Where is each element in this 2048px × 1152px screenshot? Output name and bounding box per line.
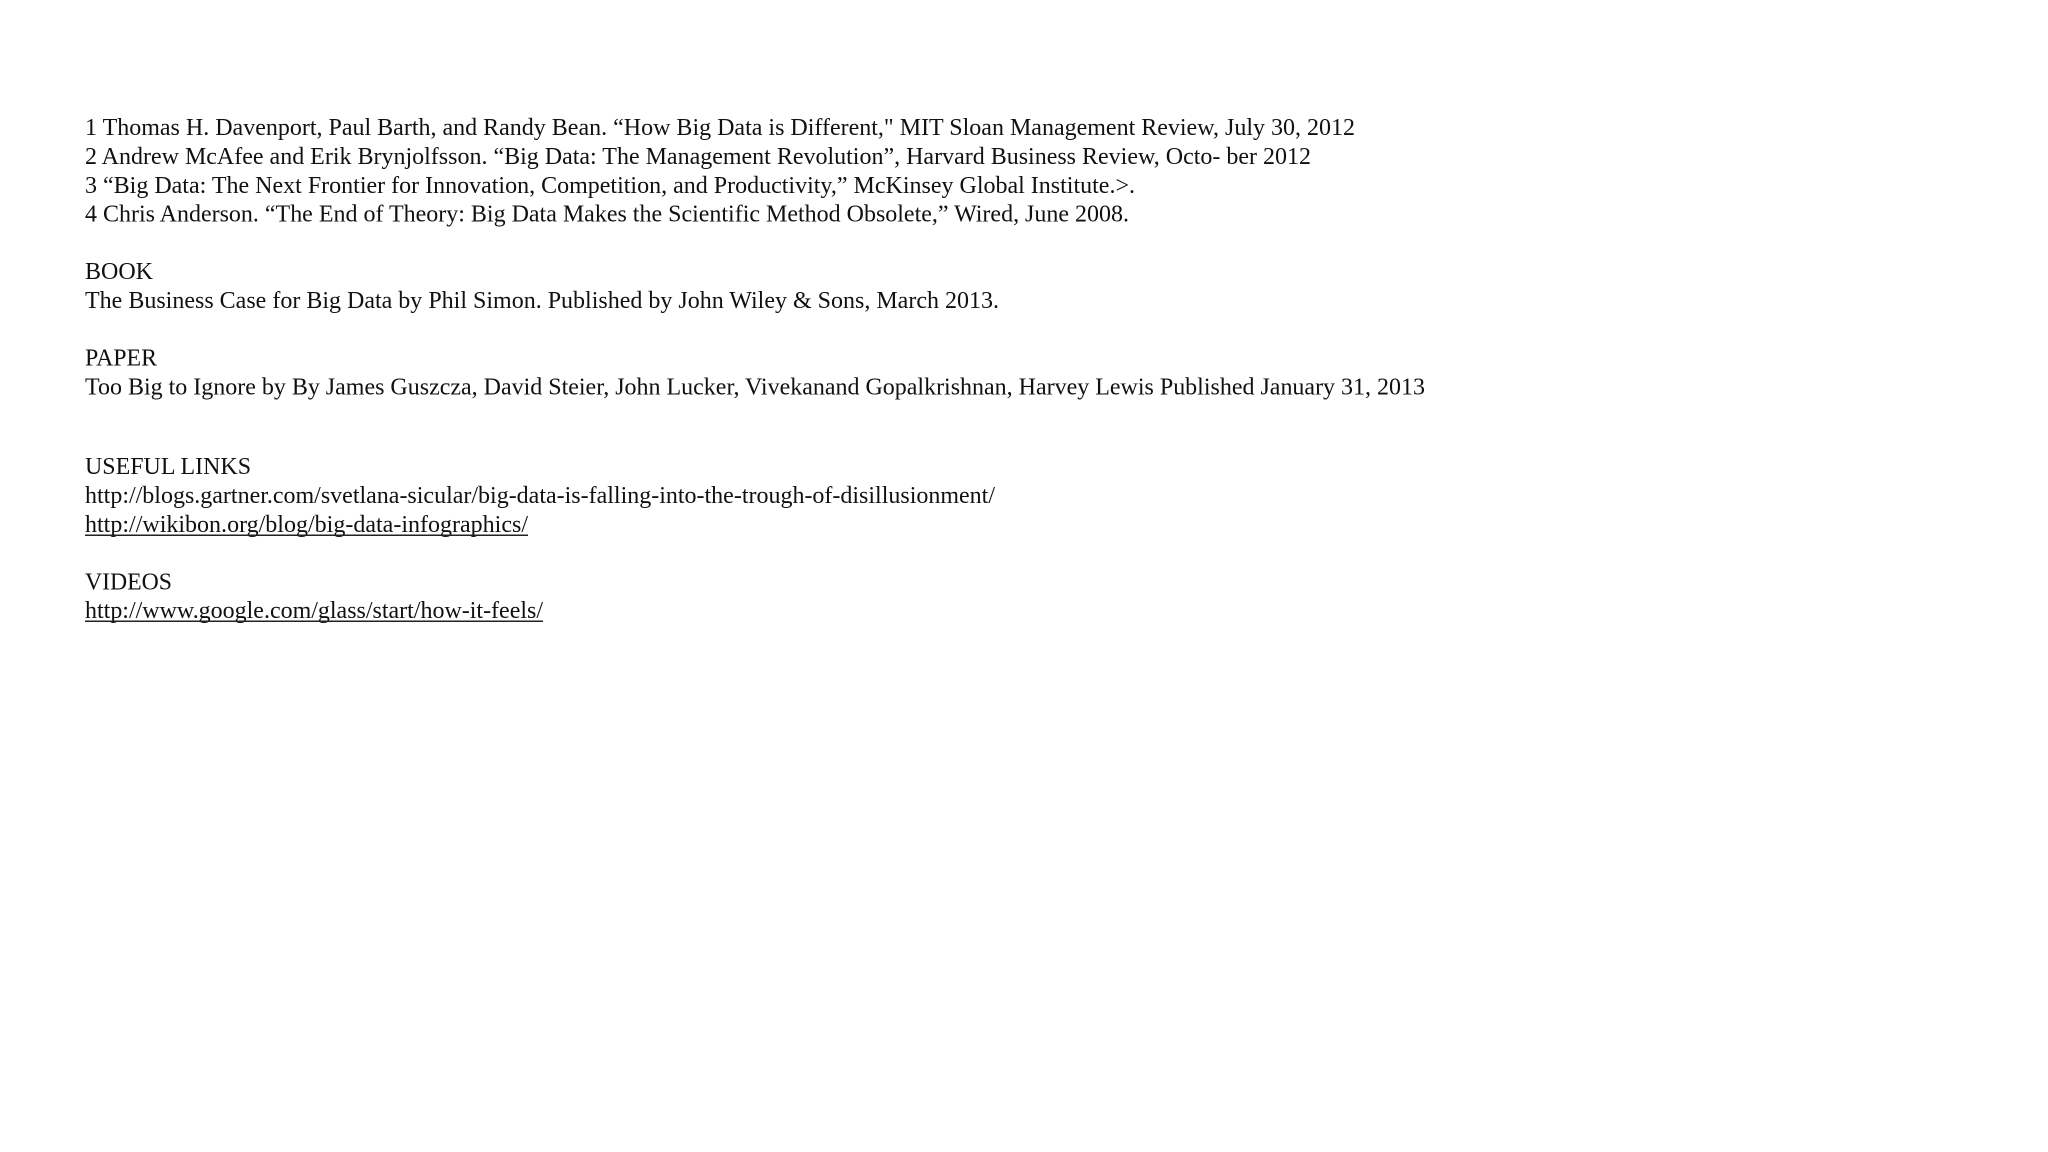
heading: book: BOOK <box>85 259 154 285</box>
citation 2: 2 Andrew McAfee and Erik Brynjolfsson. “Big Data: The Management Revolution”, Harvard Business Review, Octo- ber 2012 <box>85 144 1311 170</box>
panel: book <box>85 259 999 314</box>
link: gartner: http://blogs.gartner.com/svetlana-sicular/big-data-is-falling-into-the-trough-of-disillusionment/ <box>85 483 995 509</box>
panel: paper <box>85 346 1425 400</box>
link: wikibon: http://wikibon.org/blog/big-data-infographics/ <box>85 512 528 538</box>
book reference: The Business Case for Big Data by Phil Simon. Published by John Wiley & Sons, March 2013. <box>85 288 999 314</box>
heading: useful links: USEFUL LINKS <box>85 454 251 480</box>
heading: paper: PAPER <box>85 346 157 372</box>
citation 1: 1 Thomas H. Davenport, Paul Barth, and Randy Bean. “How Big Data is Different," MIT Sloan Management Review, July 30, 2012 <box>85 115 1355 141</box>
citation 4: 4 Chris Anderson. “The End of Theory: Big Data Makes the Scientific Method Obsolete,” Wired, June 2008. <box>85 202 1129 228</box>
heading: videos: VIDEOS <box>85 570 172 596</box>
link: google glass: http://www.google.com/glass/start/how-it-feels/ <box>85 598 543 624</box>
citation 3: 3 “Big Data: The Next Frontier for Innovation, Competition, and Productivity,” McKinsey Global Institute.>. <box>85 173 1135 199</box>
paper reference: Too Big to Ignore by By James Guszcza, David Steier, John Lucker, Vivekanand Gopalkrishnan, Harvey Lewis Published January 31, 2013 <box>85 374 1425 400</box>
panel: videos <box>85 570 543 624</box>
panel: useful links <box>85 454 995 538</box>
panel: numbered citations <box>85 115 1355 228</box>
